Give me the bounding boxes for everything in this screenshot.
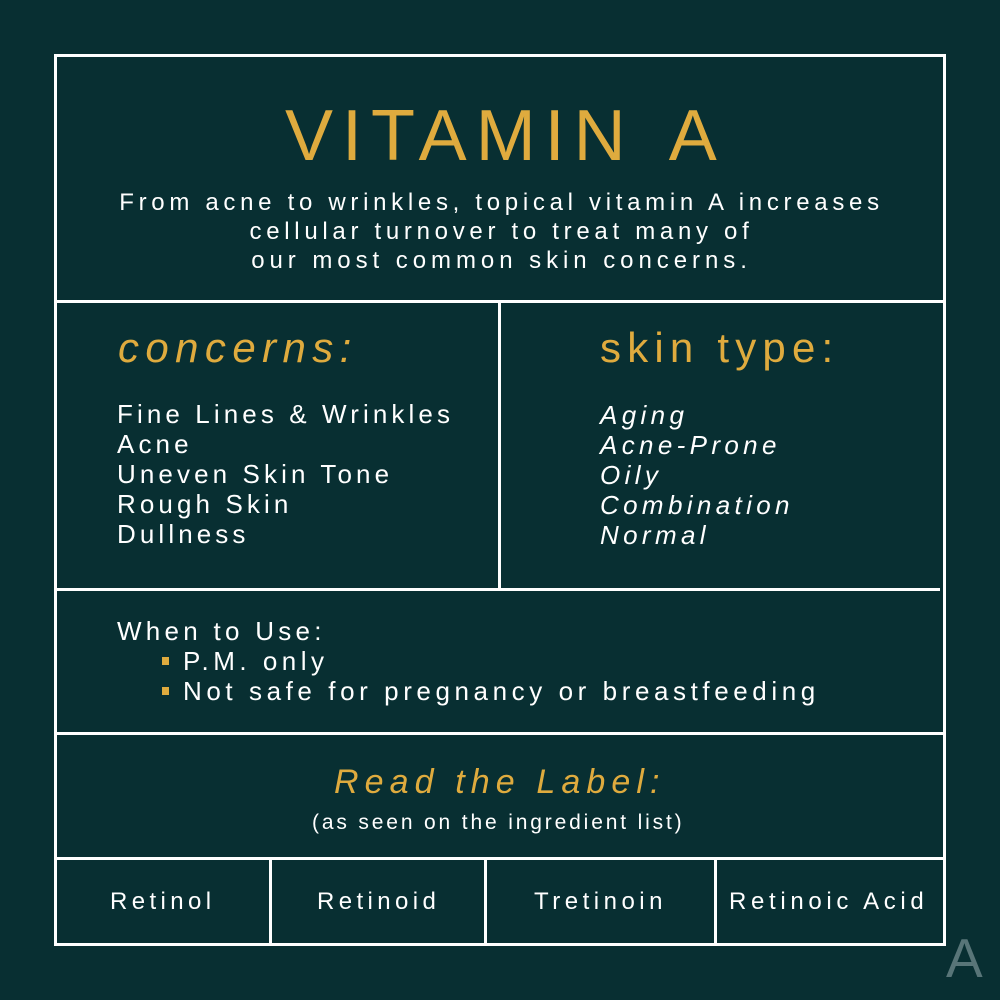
ingredient: Retinoid: Retinoid bbox=[317, 888, 440, 915]
when to use heading: When to Use: bbox=[117, 616, 326, 646]
concerns list: Fine Lines & Wrinkles bbox=[117, 399, 454, 429]
panel: concerns bbox=[117, 324, 454, 549]
skin type list: Combination bbox=[600, 490, 794, 520]
ingredient: Retinoic Acid: Retinoic Acid bbox=[729, 888, 928, 915]
skin type list: Aging bbox=[600, 400, 688, 430]
skin type list: Oily bbox=[600, 460, 662, 490]
concerns list: Dullness bbox=[117, 519, 250, 549]
skin type heading: skin type: bbox=[600, 324, 839, 371]
intro text: our most common skin concerns. bbox=[251, 247, 752, 274]
concerns list bbox=[117, 399, 454, 549]
read the label subtext: (as seen on the ingredient list) bbox=[312, 811, 685, 834]
intro text: From acne to wrinkles, topical vitamin A increases bbox=[119, 189, 884, 216]
use item 1: P.M. only bbox=[183, 646, 329, 676]
intro text: cellular turnover to treat many of bbox=[250, 218, 753, 245]
use item 2: Not safe for pregnancy or breastfeeding bbox=[183, 676, 820, 706]
bullet 1 bbox=[162, 657, 169, 665]
title: VITAMIN A bbox=[285, 96, 726, 176]
ingredient: Tretinoin: Tretinoin bbox=[534, 888, 667, 915]
skin type list bbox=[598, 400, 794, 550]
logo watermark: A bbox=[946, 927, 983, 989]
concerns heading: concerns: bbox=[118, 324, 358, 371]
skin type list: Normal bbox=[600, 520, 710, 550]
concerns list: Uneven Skin Tone bbox=[117, 459, 393, 489]
bullet 2 bbox=[162, 687, 169, 695]
skin type list: Acne-Prone bbox=[600, 430, 781, 460]
read the label heading: Read the Label: bbox=[334, 763, 666, 801]
panel: skin type bbox=[598, 324, 839, 550]
intro text bbox=[119, 189, 884, 274]
panel: when to use bbox=[117, 616, 820, 706]
concerns list: Rough Skin bbox=[117, 489, 292, 519]
concerns list: Acne bbox=[117, 429, 193, 459]
ingredient: Retinol: Retinol bbox=[110, 888, 216, 915]
